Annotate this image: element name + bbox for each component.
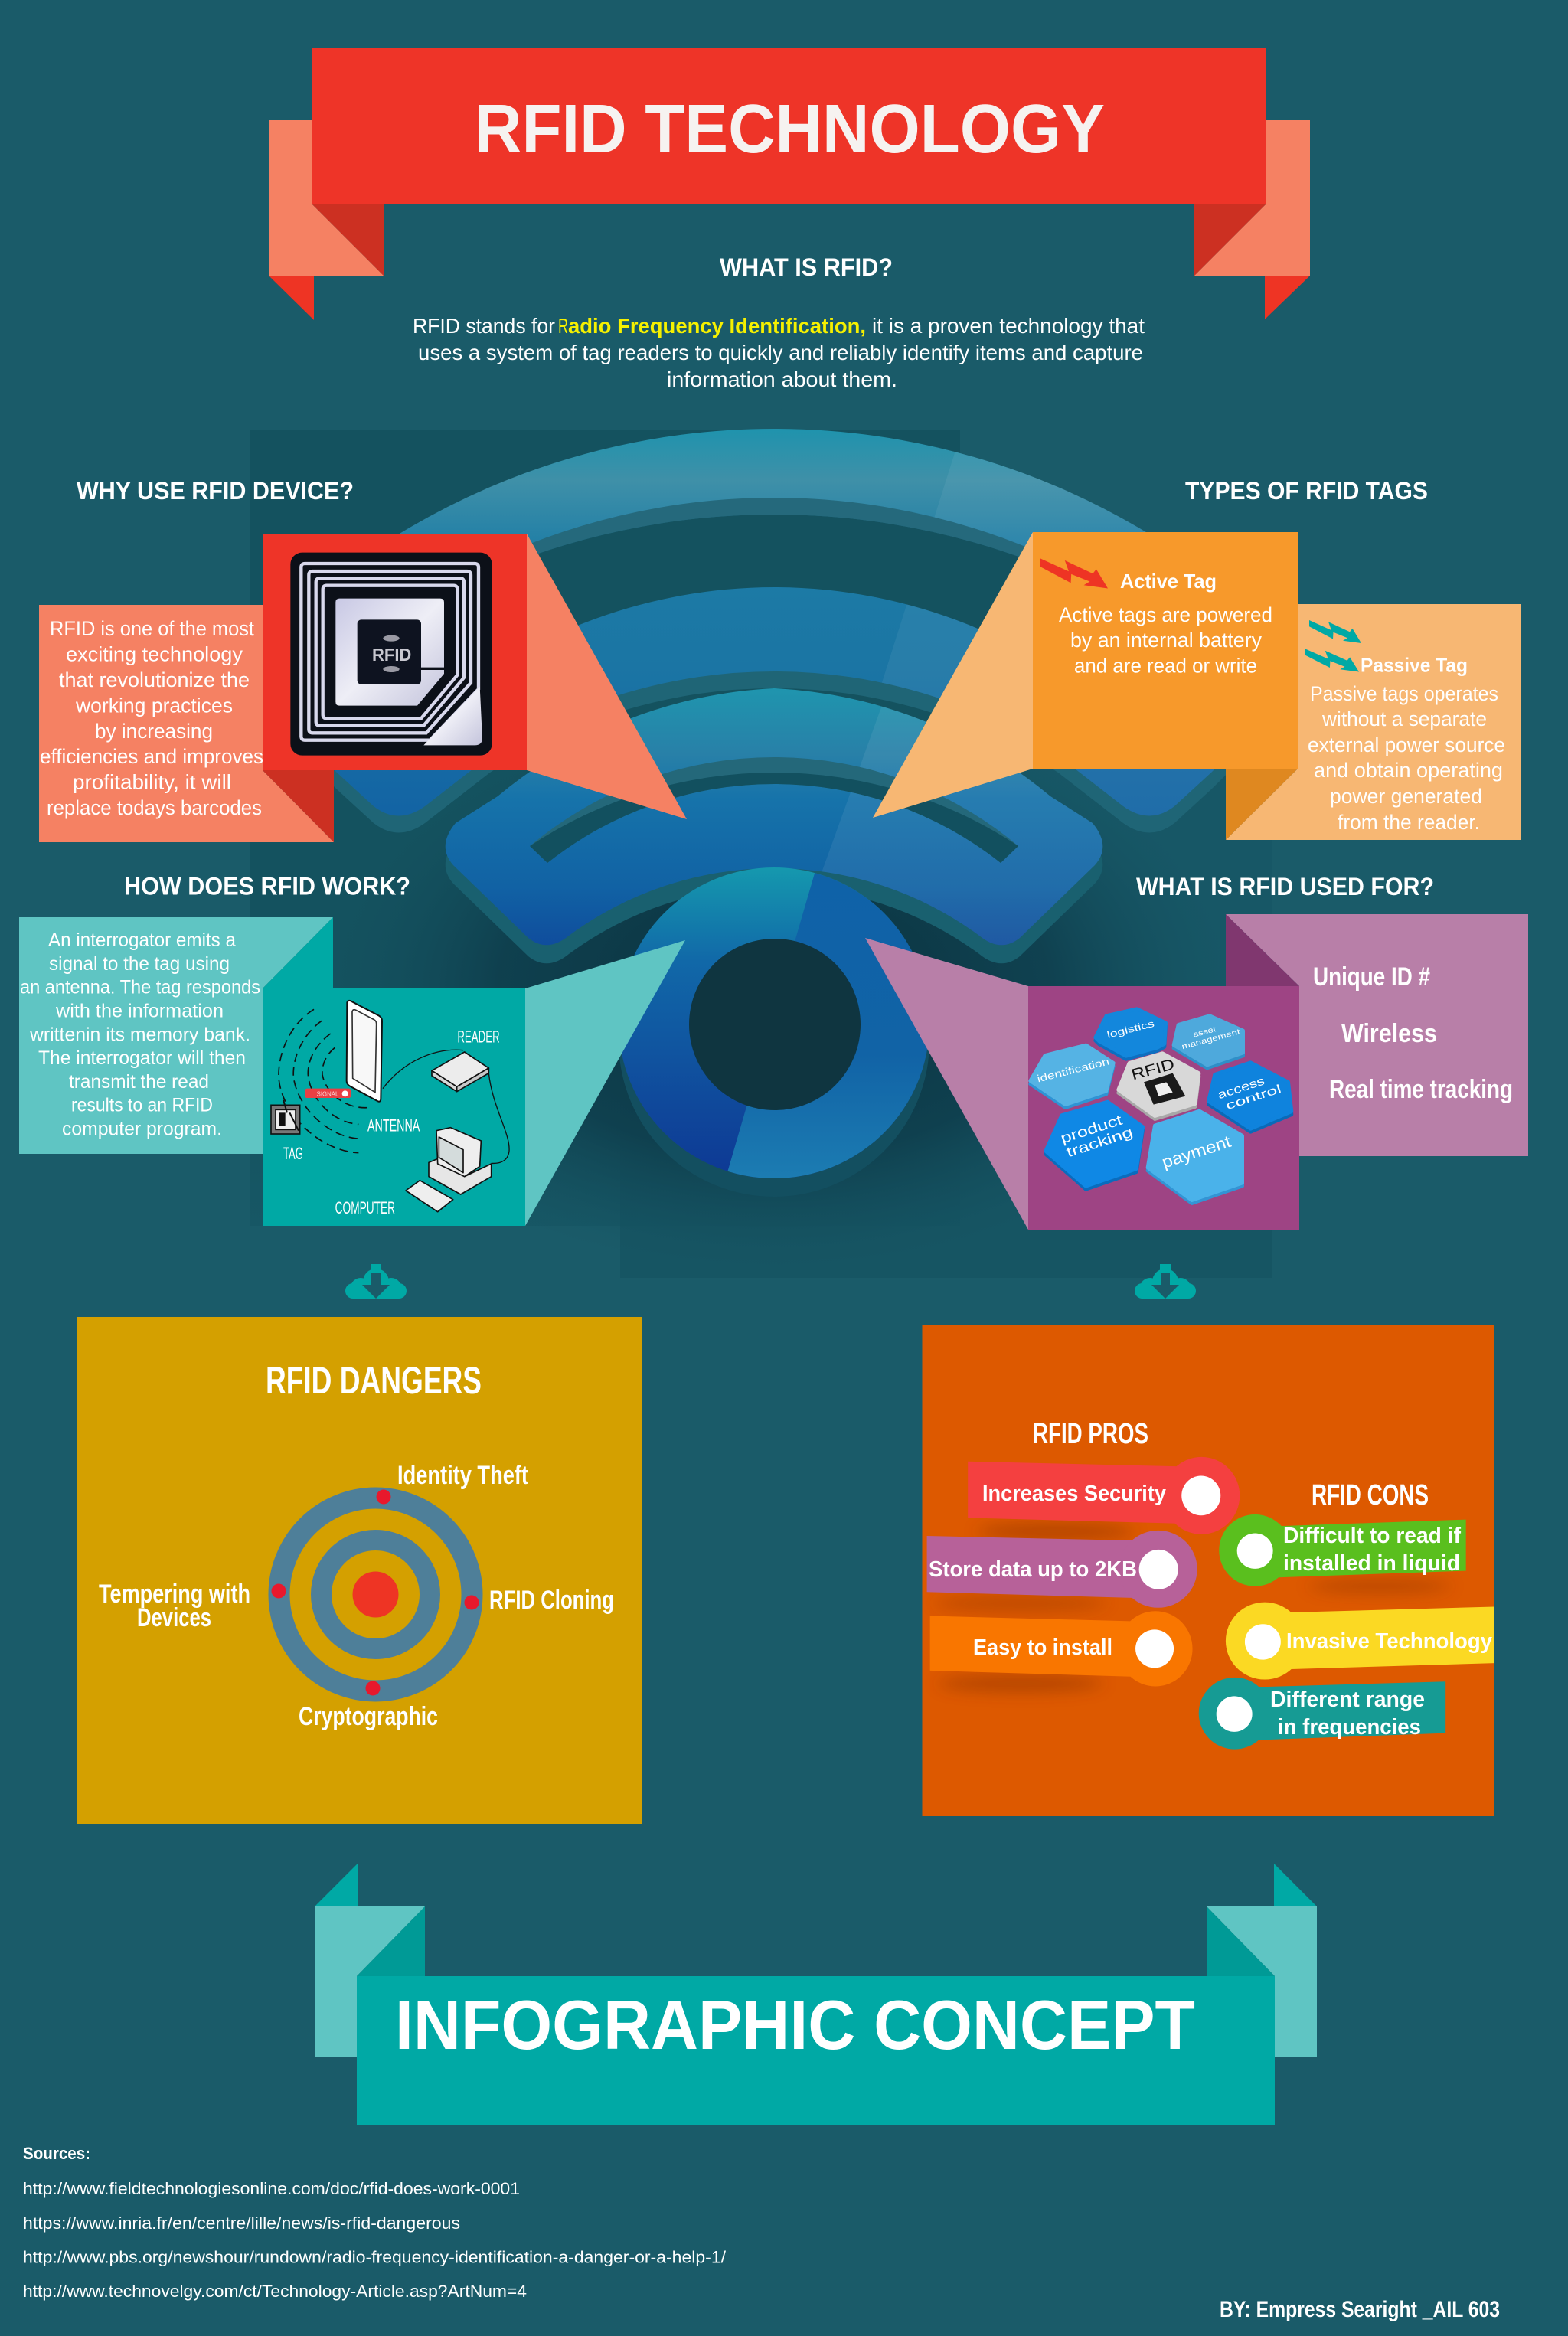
reader box: [432, 1052, 488, 1092]
how it works text: An interrogator emits a: [48, 929, 236, 951]
heading: how does RFID work: HOW DOES RFID WORK?: [124, 873, 410, 900]
passive tag text: from the reader.: [1338, 811, 1480, 834]
RFID tag icon: [271, 1100, 300, 1134]
hex: RFID centre: [1119, 1054, 1199, 1119]
hex: payment: payment: [1159, 1132, 1233, 1172]
how it works text: results to an RFID: [71, 1095, 213, 1116]
hex: product tracking: [1046, 1102, 1143, 1189]
hex: access control: access: [1216, 1074, 1266, 1102]
why use text: RFID is one of the most: [50, 617, 254, 640]
active tag heading: Active Tag: [1120, 570, 1217, 593]
panel: types of tags: [873, 532, 1521, 840]
why use text: [40, 617, 263, 819]
ribbon labels: Invasive Technology: [1286, 1629, 1492, 1654]
cons heading: RFID CONS: [1312, 1479, 1429, 1511]
intro paragraph: information about them.: [667, 368, 897, 391]
sources list: Sources:: [23, 2144, 90, 2163]
why use text: that revolutionize the: [59, 668, 250, 691]
panel: RFID dangers: [77, 1317, 642, 1824]
passive tag text: without a separate: [1321, 707, 1487, 730]
dangers labels: Devices: [137, 1603, 211, 1632]
pros heading: RFID PROS: [1033, 1418, 1148, 1450]
RFID system diagram: [271, 1001, 509, 1217]
passive tag text: and obtain operating: [1314, 759, 1503, 782]
icon: red lightning arrow: [1040, 558, 1108, 588]
hex: asset management: [1174, 1016, 1243, 1068]
hex: logistics: [1096, 1009, 1166, 1059]
ribbon: increases security: [968, 1457, 1240, 1540]
author credit: BY: Empress Searight _AIL 603: [1220, 2297, 1500, 2322]
diagram labels: ANTENNA: [368, 1116, 420, 1135]
uses list: Unique ID #: [1313, 962, 1430, 992]
sources list: http://www.technovelgy.com/ct/Technology-Article.asp?ArtNum=4: [23, 2282, 527, 2301]
active tag text: [1059, 603, 1272, 678]
wifi middle arc: [446, 688, 1102, 963]
hexagon diagram: [1031, 1009, 1292, 1204]
signal tag: [305, 1089, 351, 1098]
hex: asset management: asset: [1192, 1025, 1217, 1040]
hex: product tracking: tracking: [1064, 1123, 1135, 1160]
computer: [406, 1128, 492, 1212]
intro paragraph: it is a proven technology that: [872, 314, 1145, 338]
intro paragraph: R: [558, 314, 568, 338]
ribbon labels: in frequencies: [1278, 1715, 1421, 1740]
hex: product tracking: product: [1059, 1111, 1125, 1146]
active tag text: by an internal battery: [1070, 629, 1262, 652]
icon: RFID chip tag: RFID: [372, 645, 411, 665]
uses list: Wireless: [1341, 1019, 1437, 1048]
ribbon labels: Easy to install: [973, 1635, 1112, 1660]
signal tag: SIGNAL: [317, 1090, 338, 1098]
hex: identification: [1031, 1045, 1113, 1108]
sources list: https://www.inria.fr/en/centre/lille/news/is-rfid-dangerous: [23, 2213, 460, 2233]
how it works text: computer program.: [62, 1118, 222, 1139]
ribbon labels: [929, 1482, 1492, 1740]
icon: cloud download right: [1135, 1264, 1196, 1299]
diagram labels: [283, 1028, 500, 1217]
wifi centre ring: [619, 867, 929, 1197]
how it works text: [20, 929, 260, 1139]
why use text: by increasing: [95, 720, 213, 743]
hex: payment: [1148, 1111, 1243, 1204]
diagram labels: READER: [457, 1028, 500, 1047]
panel: RFID uses: [865, 914, 1528, 1230]
why use text: efficiencies and improves: [40, 745, 263, 768]
intro paragraph: RFID stands for: [413, 314, 555, 338]
ribbon shapes: [927, 1457, 1494, 1750]
dangers labels: RFID Cloning: [489, 1586, 614, 1615]
title text: RFID TECHNOLOGY: [475, 91, 1105, 168]
ribbon labels: Difficult to read if: [1283, 1524, 1461, 1548]
how it works text: The interrogator will then: [38, 1047, 246, 1069]
dangers labels: Tempering with: [99, 1580, 250, 1609]
heading: what is RFID used for: WHAT IS RFID USED FOR?: [1136, 873, 1434, 900]
panel: RFID pros and cons: [922, 1325, 1494, 1816]
ribbon labels: Different range: [1270, 1687, 1425, 1712]
sources list: http://www.pbs.org/newshour/rundown/radio-frequency-identification-a-danger-or-a-help-1/: [23, 2248, 727, 2266]
wifi signal backdrop: [250, 429, 1531, 1278]
target diagram: [271, 1490, 479, 1695]
hex: identification: identification: [1036, 1056, 1110, 1084]
why use text: profitability, it will: [73, 771, 231, 794]
passive tag text: power generated: [1330, 785, 1482, 808]
active tag text: and are read or write: [1074, 655, 1257, 678]
passive tag heading: Passive Tag: [1361, 654, 1468, 677]
why use text: exciting technology: [66, 643, 243, 666]
ribbon: difficult to read: [1219, 1514, 1466, 1593]
active tag text: Active tags are powered: [1059, 603, 1272, 626]
hex: logistics: logistics: [1106, 1018, 1155, 1041]
icon: RFID chip tag: [290, 553, 492, 756]
ribbon labels: installed in liquid: [1283, 1551, 1460, 1576]
panel: how RFID works: [19, 917, 685, 1226]
how it works text: signal to the tag using: [49, 953, 230, 975]
ribbon: invasive technology: [1226, 1603, 1494, 1680]
intro paragraph: uses a system of tag readers to quickly and reliably identify items and capture: [418, 341, 1143, 364]
intro paragraph: [413, 314, 1145, 391]
bottom banner: [315, 1864, 1317, 2125]
hex: asset management: management: [1181, 1028, 1241, 1051]
intro paragraph: adio Frequency Identification,: [568, 314, 866, 338]
how it works text: transmit the read: [69, 1071, 209, 1093]
ribbon: different range: [1199, 1678, 1446, 1750]
passive tag text: external power source: [1308, 733, 1505, 756]
heading: what is RFID: WHAT IS RFID?: [720, 253, 893, 281]
how it works text: writtenin its memory bank.: [29, 1024, 250, 1045]
ribbon: easy to install: [930, 1611, 1193, 1693]
sources list: [23, 2144, 727, 2301]
icon: teal lightning arrows: [1305, 620, 1361, 672]
banner text: INFOGRAPHIC CONCEPT: [395, 1987, 1195, 2064]
title banner: [269, 48, 1310, 320]
heading: why use RFID device: WHY USE RFID DEVICE?: [77, 477, 354, 505]
dangers labels: Cryptographic: [299, 1702, 438, 1731]
dangers labels: [99, 1461, 614, 1731]
why use text: replace todays barcodes: [47, 796, 262, 819]
dangers heading: RFID DANGERS: [266, 1359, 482, 1402]
diagram labels: TAG: [283, 1144, 303, 1163]
hex: RFID centre: RFID: [1129, 1056, 1177, 1083]
antenna: [347, 1001, 382, 1102]
panel: why use RFID: [39, 534, 687, 842]
ribbon labels: Store data up to 2KB: [929, 1557, 1137, 1582]
uses list: Real time tracking: [1329, 1075, 1513, 1104]
passive tag text: [1308, 682, 1505, 834]
wifi outer arc: [334, 429, 1226, 833]
why use text: working practices: [75, 694, 233, 717]
signal waves: [279, 1009, 368, 1153]
passive tag text: Passive tags operates: [1310, 682, 1498, 705]
ribbon labels: Increases Security: [982, 1482, 1166, 1506]
uses list: [1313, 962, 1513, 1104]
ribbon: store data: [927, 1531, 1197, 1612]
hex: access control: [1208, 1063, 1292, 1132]
diagram labels: COMPUTER: [335, 1198, 395, 1217]
heading: types of RFID tags: TYPES OF RFID TAGS: [1185, 477, 1428, 505]
what is RFID section: [413, 253, 1145, 391]
how it works text: an antenna. The tag responds: [20, 977, 260, 998]
hex: access control: control: [1224, 1083, 1283, 1112]
dangers labels: Identity Theft: [397, 1461, 528, 1490]
cables: [383, 1050, 509, 1163]
icon: cloud download left: [345, 1264, 407, 1299]
sources list: http://www.fieldtechnologiesonline.com/doc/rfid-does-work-0001: [23, 2179, 520, 2198]
how it works text: with the information: [55, 1000, 224, 1021]
